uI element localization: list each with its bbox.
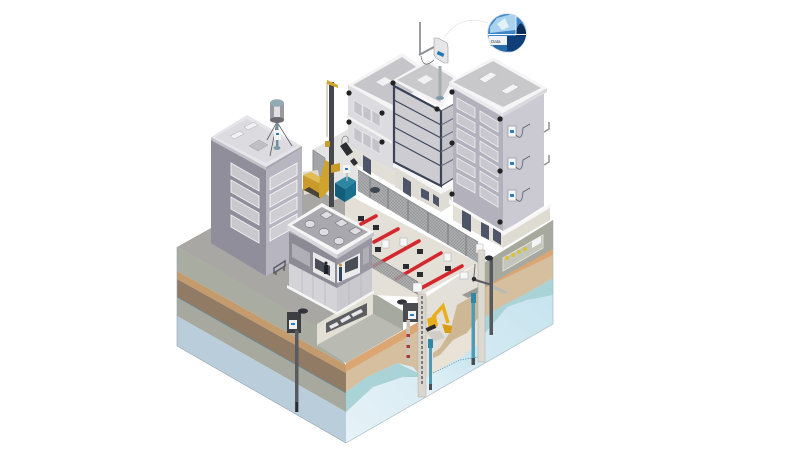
- control room building: [287, 203, 374, 315]
- data portal circle: Data: [491, 39, 501, 44]
- middle building: [390, 60, 458, 212]
- piezometer: tall: [471, 264, 476, 365]
- roof units: [479, 72, 519, 94]
- blue enclosure with sensor and solar panel: [335, 136, 358, 202]
- ledge and ground floor: [449, 199, 551, 236]
- soil layers: left face: [177, 247, 346, 443]
- louvers: [292, 243, 369, 267]
- data portal circle: [488, 14, 526, 52]
- excavation pit: [345, 193, 478, 397]
- window with people left: [313, 252, 335, 283]
- drilling rig and excavator: [303, 80, 340, 207]
- rig mast: [329, 82, 334, 207]
- dark frame and slats: [394, 86, 454, 186]
- tall right building: [449, 57, 551, 248]
- diaphragm wall right: [478, 250, 485, 362]
- roof: [287, 203, 374, 255]
- excavation side view: [426, 263, 478, 397]
- red struts: [361, 216, 462, 291]
- piezometer: excavation floor: [428, 339, 433, 390]
- monitoring well: near pit: [397, 299, 418, 362]
- diaphragm wall left: [418, 294, 426, 397]
- side antennas: [544, 122, 549, 165]
- window with people right: [337, 253, 360, 283]
- retaining wall right with control panel: [485, 220, 553, 287]
- windows: [354, 100, 380, 154]
- rig body: [303, 175, 319, 197]
- monitoring well: pavement: [287, 308, 308, 412]
- weather station: [267, 99, 292, 156]
- soil layers: right face: [346, 220, 553, 443]
- corner clamps: [449, 89, 503, 225]
- front pit fence: [372, 255, 418, 295]
- bench: [274, 261, 285, 275]
- excavator: [426, 306, 452, 341]
- retaining wall under fence: [373, 293, 403, 330]
- raised wall with instrument recess: [317, 291, 373, 346]
- strut clamps: [358, 216, 451, 277]
- fence along excavation: [358, 170, 478, 263]
- site fence: [313, 150, 325, 180]
- isometric ground block: [177, 185, 553, 443]
- roof units: [230, 122, 268, 151]
- back building: [346, 53, 440, 186]
- tie-back anchor: [472, 277, 508, 294]
- window panels left: [231, 163, 259, 243]
- window panels: [457, 98, 498, 207]
- pale yard behind rig: [312, 128, 358, 200]
- pit floor: [345, 193, 478, 297]
- left office building: [211, 99, 302, 276]
- wall sensors: [508, 126, 516, 201]
- strut sensors: [382, 238, 483, 292]
- roof fans and units: [305, 211, 362, 244]
- roof gateway and antenna: [419, 20, 488, 100]
- dark inclinometer pipe: [485, 255, 493, 335]
- wall panel lines: [302, 270, 361, 307]
- window panels right: [270, 163, 297, 241]
- manhole: [370, 187, 380, 193]
- lower pavement: [317, 314, 403, 363]
- pavement top surface: [177, 185, 372, 326]
